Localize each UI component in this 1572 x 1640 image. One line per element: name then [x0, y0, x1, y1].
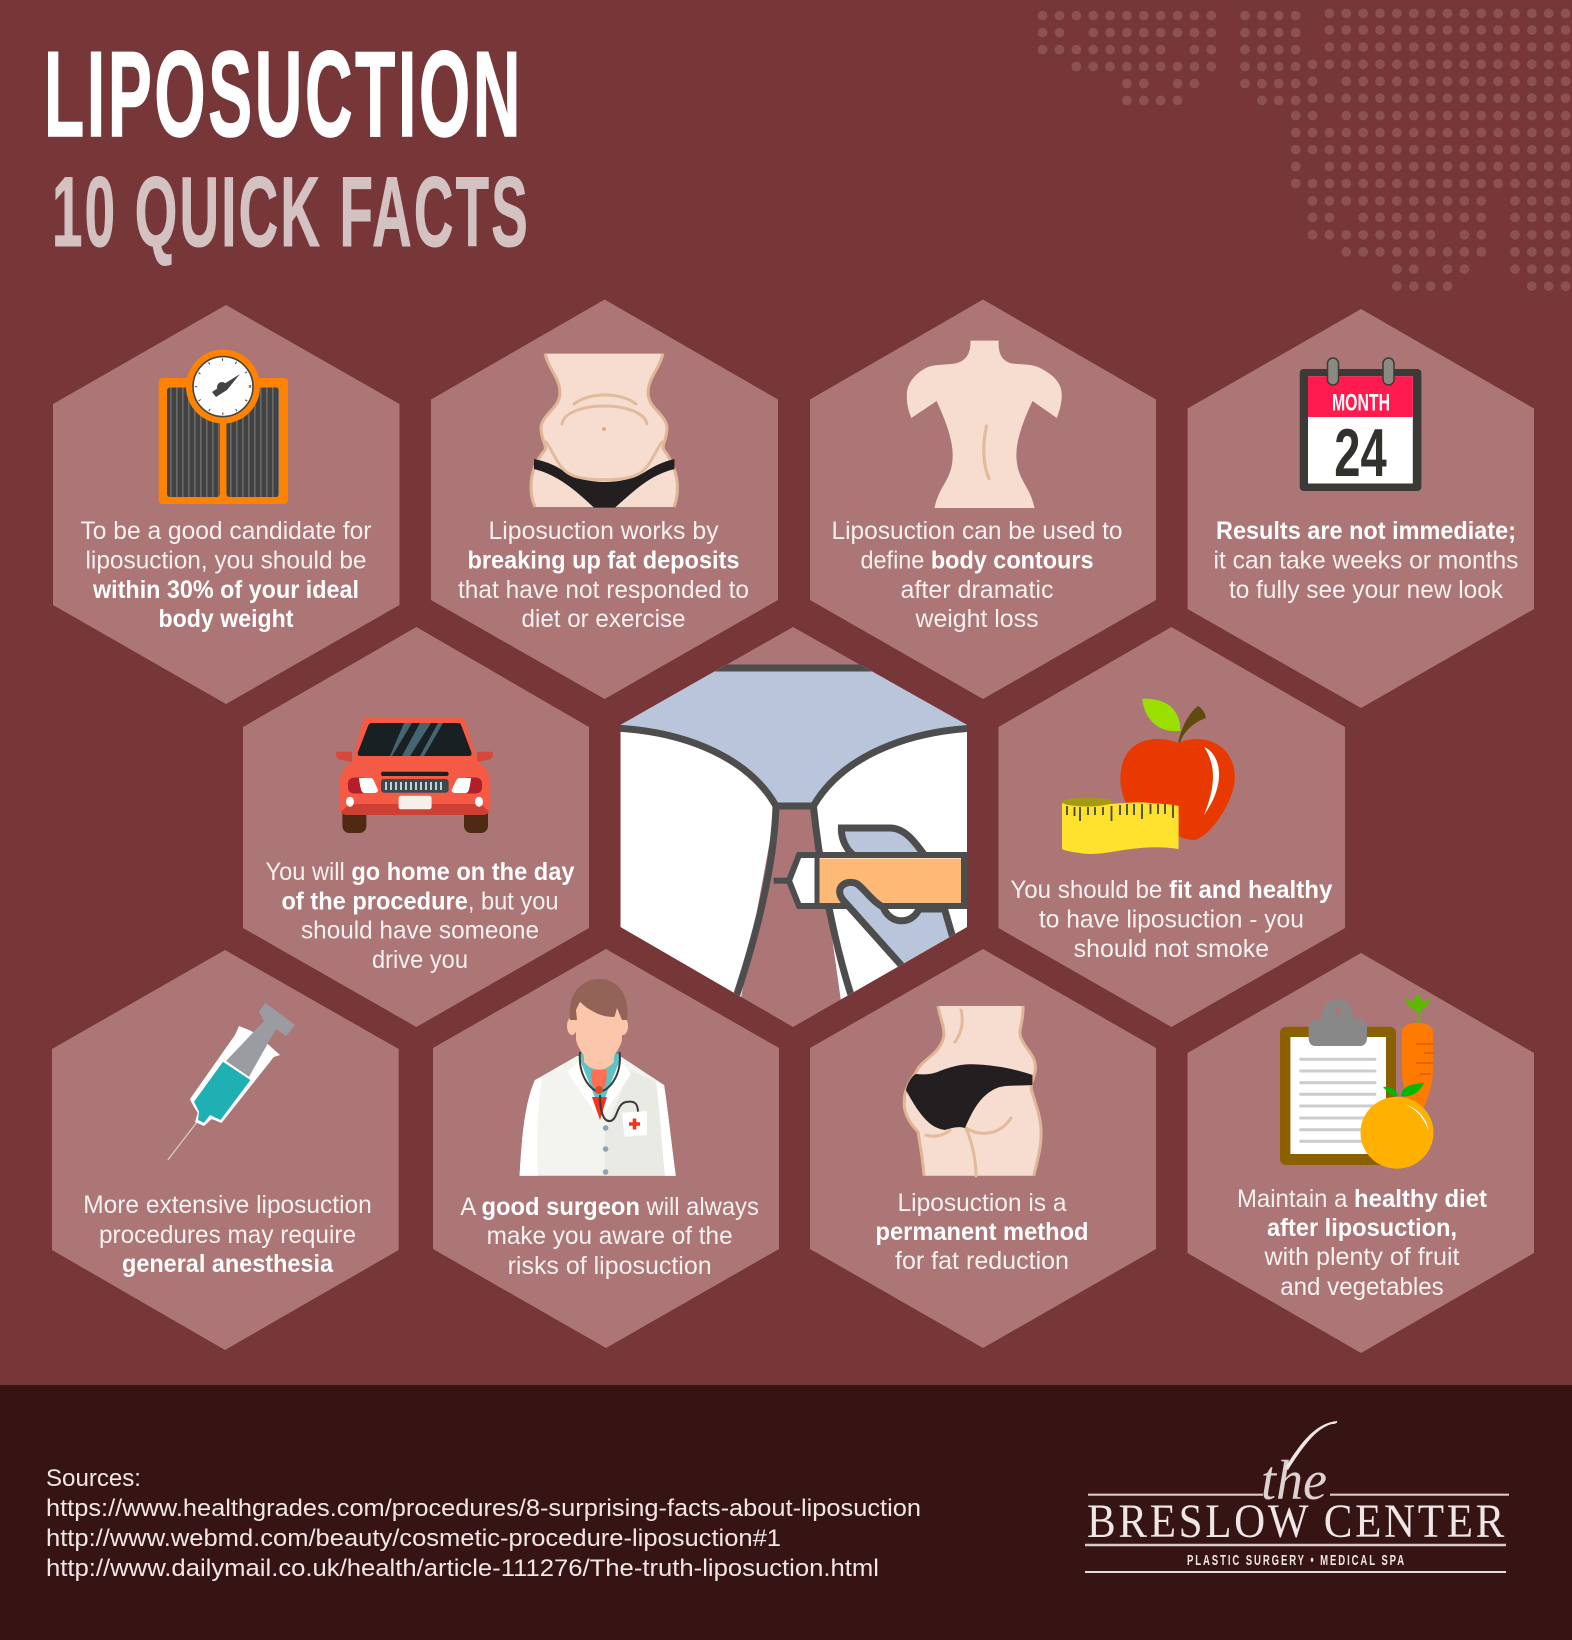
- panel: go home on the day: [243, 627, 589, 1027]
- icon: buttocks: [904, 1006, 1041, 1176]
- text: permanent method: [876, 1218, 1088, 1246]
- text: procedures may require: [99, 1221, 356, 1249]
- panel: breaking up fat deposits: [431, 300, 778, 699]
- subtitle: 10 QUICK FACTS: [52, 156, 530, 267]
- text: To be a good candidate for: [80, 517, 372, 545]
- text: drive you: [372, 946, 468, 974]
- text: to fully see your new look: [1229, 576, 1503, 604]
- text: More extensive liposuction: [83, 1191, 372, 1219]
- text: of the procedure, but you: [282, 887, 558, 915]
- panel: center liposuction illustration: [615, 627, 975, 1030]
- icon: clipboard and fruit: [1280, 994, 1434, 1169]
- text: Liposuction can be used to: [832, 517, 1122, 545]
- icon: syringe: [168, 1003, 295, 1160]
- text: should not smoke: [1074, 935, 1269, 963]
- text: [83, 1191, 372, 1278]
- text: for fat reduction: [895, 1247, 1069, 1275]
- panel: ideal body weight: [53, 305, 400, 704]
- icon: apple and tape measure: [1062, 699, 1235, 854]
- dotted world map background: [1043, 13, 1566, 286]
- text: [460, 1193, 759, 1280]
- text: make you aware of the: [487, 1222, 733, 1250]
- panel: good surgeon: [433, 949, 779, 1348]
- text: Liposuction works by: [488, 517, 719, 545]
- title: LIPOSUCTION: [44, 26, 523, 162]
- text: breaking up fat deposits: [468, 546, 740, 574]
- footer band: [0, 1385, 1572, 1640]
- syringe: [841, 828, 927, 858]
- text: liposuction, you should be: [86, 546, 366, 574]
- icon: calendar: 24: [1334, 415, 1387, 491]
- text: [832, 517, 1122, 633]
- panel: results not immediate: [1188, 309, 1534, 708]
- logo: The Breslow Center: BRESLOW CENTER: [1087, 1495, 1507, 1548]
- text: weight loss: [915, 605, 1038, 633]
- panel: general anesthesia: [52, 950, 399, 1350]
- logo: The Breslow Center: the: [1261, 1450, 1327, 1512]
- text: [80, 517, 372, 633]
- sources list: [46, 1465, 921, 1582]
- text: that have not responded to: [458, 576, 749, 604]
- text: with plenty of fruit: [1263, 1243, 1460, 1271]
- logo: The Breslow Center: PLASTIC SURGERY • MEDICAL SPA: [1187, 1552, 1406, 1569]
- sources list: http://www.webmd.com/beauty/cosmetic-procedure-liposuction#1: [46, 1525, 781, 1552]
- text: You will go home on the day: [266, 858, 575, 886]
- sources list: https://www.healthgrades.com/procedures/8-surprising-facts-about-liposuction: [46, 1495, 921, 1522]
- panel: body contours: [810, 300, 1156, 699]
- text: Maintain a healthy diet: [1237, 1185, 1488, 1213]
- icon: calendar: [1300, 358, 1421, 491]
- text: [1214, 517, 1518, 604]
- icon: belly: [531, 354, 678, 508]
- text: diet or exercise: [522, 605, 686, 633]
- text: should have someone: [301, 917, 539, 945]
- text: to have liposuction - you: [1039, 906, 1304, 934]
- text: [458, 517, 749, 633]
- text: [1010, 876, 1332, 963]
- text: A good surgeon will always: [460, 1193, 759, 1221]
- panel: permanent method: [810, 949, 1156, 1348]
- text: after liposuction,: [1267, 1214, 1457, 1242]
- text: You should be fit and healthy: [1010, 876, 1332, 904]
- text: Results are not immediate;: [1216, 517, 1516, 545]
- underwear: [615, 665, 975, 806]
- panel: fit and healthy: [998, 627, 1345, 1027]
- text: define body contours: [860, 546, 1094, 574]
- panel: healthy diet: [1188, 953, 1534, 1353]
- text: [266, 858, 575, 974]
- text: after dramatic: [900, 576, 1054, 604]
- icon: calendar: MONTH: [1332, 390, 1390, 417]
- icon: doctor: [520, 979, 676, 1176]
- text: [1237, 1185, 1488, 1301]
- text: it can take weeks or months: [1214, 546, 1518, 574]
- text: body weight: [158, 605, 294, 633]
- text: within 30% of your ideal: [92, 576, 359, 604]
- text: Liposuction is a: [898, 1189, 1067, 1217]
- icon: red car: [336, 717, 493, 833]
- icon: torso back: [907, 341, 1062, 508]
- sources list: Sources:: [46, 1465, 141, 1492]
- thighs: [620, 665, 967, 1000]
- gloved finger: [840, 882, 955, 975]
- sources list: http://www.dailymail.co.uk/health/article-111276/The-truth-liposuction.html: [46, 1555, 879, 1582]
- icon: bathroom scale: [159, 350, 288, 504]
- text: and vegetables: [1280, 1273, 1444, 1301]
- logo: The Breslow Center: [1085, 1421, 1509, 1572]
- text: risks of liposuction: [508, 1252, 712, 1280]
- text: general anesthesia: [122, 1250, 334, 1278]
- text: [876, 1189, 1088, 1275]
